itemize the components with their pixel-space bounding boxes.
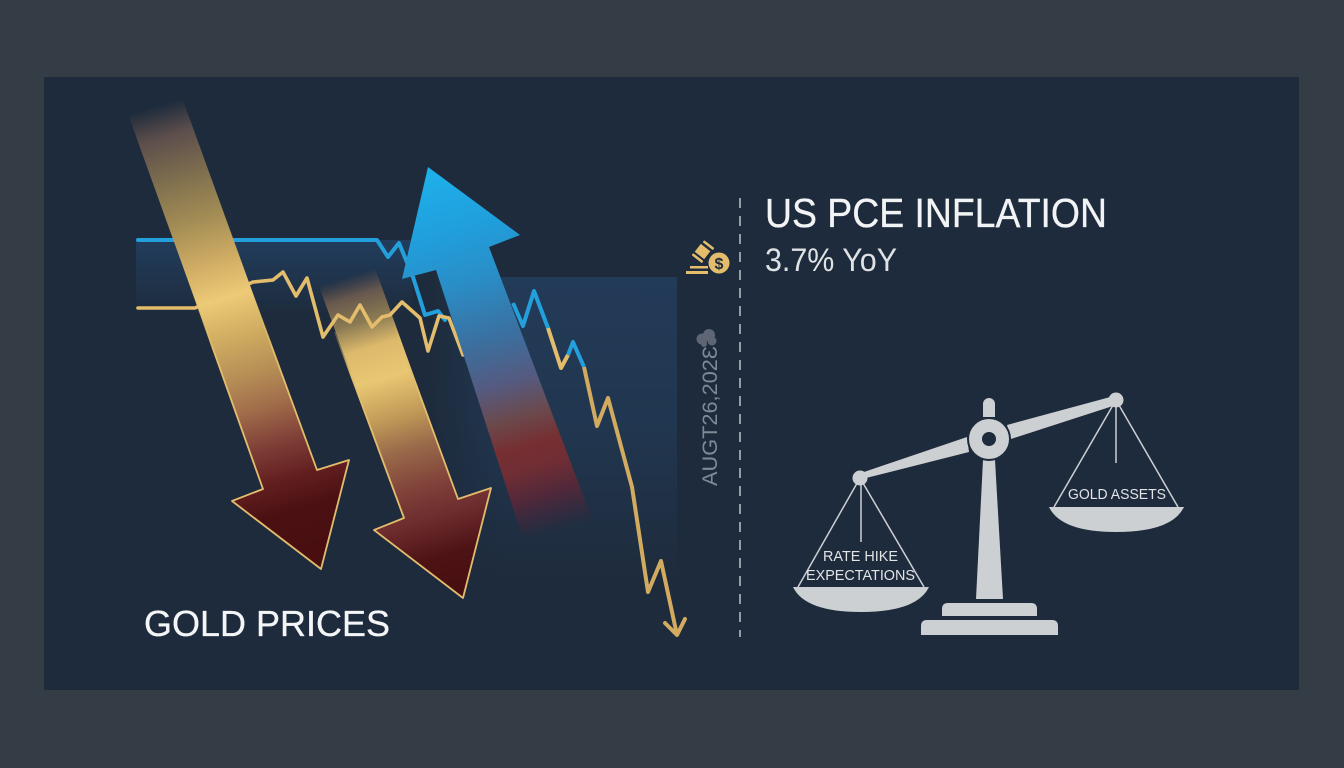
left pivot xyxy=(852,470,868,486)
main dark panel xyxy=(44,77,1299,690)
second arrow edge highlight xyxy=(335,316,491,598)
first arrow edge highlight xyxy=(192,290,349,569)
line: blue series short segment xyxy=(568,342,584,367)
icon: gavel and dollar coin xyxy=(686,240,730,274)
date label rotated: AUGT26,202Ɛ xyxy=(699,346,722,486)
line: gold series falling xyxy=(548,328,568,368)
arrow: blue up arrow xyxy=(402,167,600,560)
infographic canvas xyxy=(44,77,1299,690)
scale beam right xyxy=(1007,396,1116,439)
icon: balance scale xyxy=(793,392,1184,635)
arrow: second gold down arrow xyxy=(310,240,491,598)
left pan strings xyxy=(798,478,924,587)
label: rate hike: RATE HIKE xyxy=(823,548,898,565)
value: 3.7% YoY: 3.7% YoY xyxy=(765,242,897,278)
right pan xyxy=(1049,507,1184,532)
left pan xyxy=(793,587,929,612)
label: gold assets: GOLD ASSETS xyxy=(1068,486,1166,503)
heading: US PCE inflation: US PCE INFLATION xyxy=(765,190,1107,236)
line: gold series left xyxy=(138,272,463,355)
divider dashed line xyxy=(739,198,741,637)
label: gold prices: GOLD PRICES xyxy=(144,603,390,644)
scale base upper xyxy=(942,603,1037,616)
scale top finial xyxy=(983,398,995,417)
chart shaded area right xyxy=(456,277,677,516)
chart shaded band left xyxy=(136,240,412,312)
line arrowhead xyxy=(665,619,685,635)
scale beam left xyxy=(864,437,969,478)
icon: smudged money symbol xyxy=(696,329,716,347)
scale base lower xyxy=(921,620,1058,635)
scale hub xyxy=(968,418,1010,460)
right pivot xyxy=(1108,392,1124,408)
arrow: first gold down arrow xyxy=(124,70,349,569)
line: blue series upper xyxy=(138,240,445,320)
icon: gavel and dollar coin: $ xyxy=(715,256,724,273)
chart: gold prices xyxy=(124,70,685,635)
line: gold series final drop xyxy=(584,367,677,635)
scale column xyxy=(976,460,1003,599)
line: blue series right xyxy=(513,291,548,328)
right pan strings xyxy=(1054,400,1178,507)
label: expectations: EXPECTATIONS xyxy=(806,567,915,584)
